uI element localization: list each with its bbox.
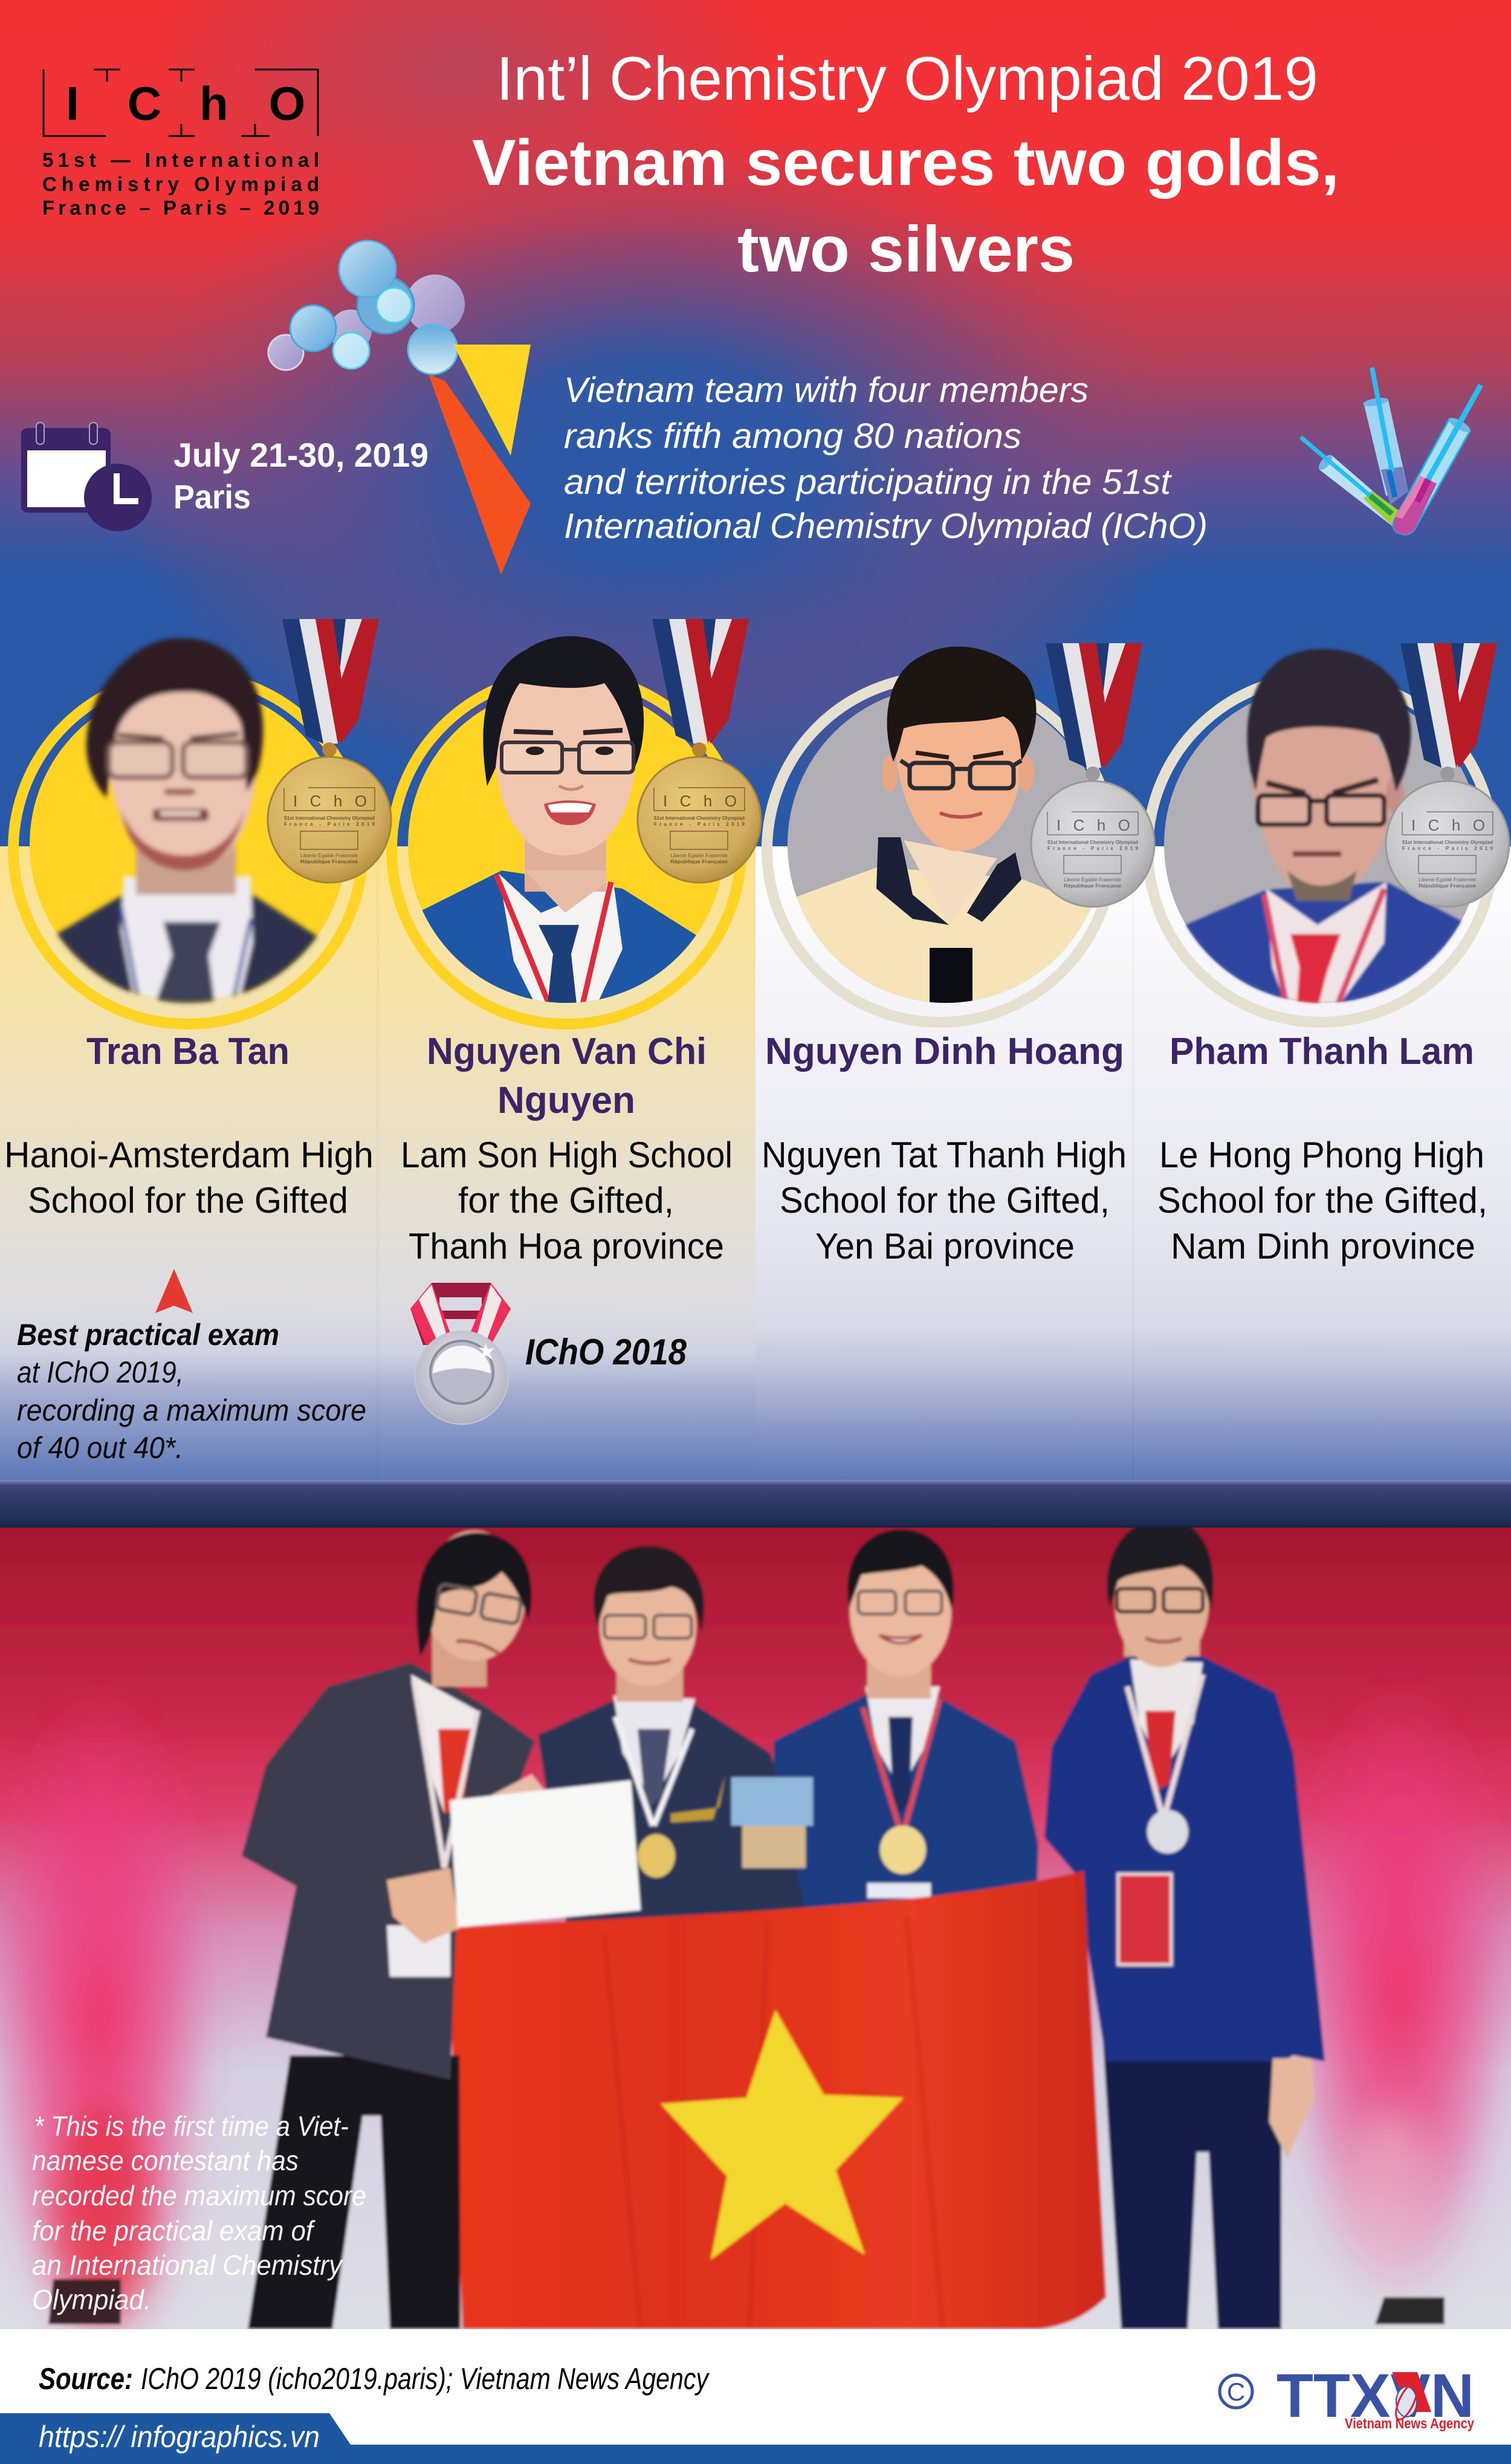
footer background bbox=[0, 2329, 1511, 2464]
IChO logo: I bbox=[66, 77, 79, 130]
IChO logo: 51st — International bbox=[42, 149, 319, 171]
title: Vietnam secures two golds, bbox=[472, 126, 1339, 199]
title: two silvers bbox=[737, 212, 1075, 285]
schools: Hanoi-Amsterdam High bbox=[4, 1135, 374, 1175]
top gradient background bbox=[0, 0, 1511, 858]
icon: IChO 2018 silver medal bbox=[410, 1283, 511, 1424]
footnote: for the practical exam of bbox=[32, 2215, 315, 2246]
footnote bbox=[32, 2110, 366, 2315]
panel: gold medallists bbox=[0, 846, 756, 1487]
footer url bar bbox=[0, 2413, 1511, 2464]
IChO 2018 label: IChO 2018 bbox=[525, 1332, 687, 1372]
medal: silver 2: France - Paris 2019 bbox=[1402, 846, 1493, 851]
names of contestants: Pham Thanh Lam bbox=[1170, 1031, 1474, 1072]
schools: for the Gifted, bbox=[458, 1180, 674, 1221]
icon: test tubes bbox=[1301, 368, 1481, 534]
medal: gold 2: Liberté Égalité Fraternité bbox=[670, 853, 728, 858]
medal: gold 1: République Française bbox=[300, 859, 358, 864]
medal: silver 2 bbox=[1386, 643, 1509, 907]
team photo bbox=[0, 1493, 1511, 2370]
icon: molecule bubbles bbox=[268, 241, 465, 374]
date and place: Paris bbox=[173, 478, 251, 516]
arrow: red pointer bbox=[155, 1269, 193, 1313]
logo: TTXVN: TTXVN bbox=[1276, 2361, 1474, 2430]
medal: silver 1 bbox=[1031, 643, 1154, 907]
IChO logo: O bbox=[269, 77, 305, 130]
schools: Nguyen Tat Thanh High bbox=[762, 1135, 1127, 1175]
best practical exam note: of 40 out 40*. bbox=[17, 1431, 183, 1465]
schools: Nam Dinh province bbox=[1171, 1226, 1475, 1266]
best practical exam note: recording a maximum score bbox=[17, 1393, 366, 1427]
person: second from right bbox=[771, 1529, 1038, 1934]
names of contestants: Nguyen Van Chi bbox=[427, 1031, 707, 1072]
schools bbox=[4, 1135, 1487, 1266]
orange triangle bbox=[429, 374, 531, 575]
footnote: * This is the first time a Viet- bbox=[34, 2110, 349, 2142]
IChO logo bbox=[42, 70, 319, 219]
schools: School for the Gifted bbox=[28, 1180, 348, 1221]
footnote: recorded the maximum score bbox=[32, 2180, 366, 2211]
schools: Yen Bai province bbox=[815, 1226, 1075, 1266]
title: Int’l Chemistry Olympiad 2019 bbox=[496, 44, 1318, 113]
footnote: Olympiad. bbox=[32, 2284, 151, 2315]
medal: silver 2: I C h O bbox=[1411, 816, 1485, 834]
IChO logo: Chemistry Olympiad bbox=[42, 173, 319, 195]
medal: silver 2: Liberté Égalité Fraternité bbox=[1419, 877, 1477, 883]
yellow triangle bbox=[453, 345, 531, 456]
IChO logo: France – Paris – 2019 bbox=[42, 196, 319, 219]
summary text: and territories participating in the 51st bbox=[564, 462, 1173, 502]
best practical exam note: Best practical exam bbox=[17, 1318, 279, 1352]
medal: gold 2 bbox=[638, 619, 761, 883]
medal: silver 2: 51st International Chemistry Olympiad bbox=[1402, 840, 1493, 845]
medal: silver 1: République Française bbox=[1064, 883, 1122, 889]
schools: Lam Son High School bbox=[401, 1135, 733, 1175]
source line: IChO 2019 (icho2019.paris); Vietnam News Agency bbox=[141, 2362, 710, 2396]
summary text bbox=[564, 371, 1208, 546]
portrait: Nguyen Dinh Hoang bbox=[767, 647, 1113, 1028]
logo: TTXVN: Vietnam News Agency bbox=[1345, 2416, 1475, 2432]
medal: gold 2: République Française bbox=[670, 859, 728, 864]
schools: Le Hong Phong High bbox=[1159, 1135, 1484, 1175]
medal: gold 1: Liberté Égalité Fraternité bbox=[300, 853, 358, 858]
source line: Source: bbox=[39, 2362, 133, 2396]
medal: silver 2: République Française bbox=[1419, 883, 1477, 889]
IChO logo: h bbox=[199, 77, 228, 130]
IChO logo: C bbox=[128, 77, 161, 130]
summary text: International Chemistry Olympiad (IChO) bbox=[564, 507, 1208, 546]
schools: School for the Gifted, bbox=[1157, 1180, 1487, 1221]
logo: TTXVN: C bbox=[1227, 2378, 1245, 2406]
medal: gold 2: 51st International Chemistry Olympiad bbox=[654, 815, 745, 821]
names of contestants: Nguyen Dinh Hoang bbox=[765, 1031, 1124, 1072]
footnote: namese contestant has bbox=[32, 2145, 299, 2176]
summary text: Vietnam team with four members bbox=[564, 371, 1089, 410]
medal: gold 1: France - Paris 2019 bbox=[284, 822, 375, 827]
panel: silver medallists bbox=[756, 846, 1511, 1487]
medal: gold 2: I C h O bbox=[663, 792, 737, 810]
best practical exam note: at IChO 2019, bbox=[17, 1355, 184, 1389]
icon: calendar and clock bbox=[21, 423, 152, 531]
person: far right bbox=[1044, 1517, 1325, 2329]
date and place: July 21-30, 2019 bbox=[173, 436, 429, 474]
medal: gold 1: 51st International Chemistry Olympiad bbox=[284, 815, 375, 821]
medal: silver 1: I C h O bbox=[1056, 816, 1130, 834]
person: second from left bbox=[538, 1546, 813, 1934]
medal: silver 1: France - Paris 2019 bbox=[1047, 846, 1139, 851]
schools: School for the Gifted, bbox=[780, 1180, 1110, 1221]
summary text: ranks fifth among 80 nations bbox=[564, 417, 1021, 456]
medal: silver 1: Liberté Égalité Fraternité bbox=[1064, 877, 1122, 883]
medal: gold 2: France - Paris 2019 bbox=[654, 822, 745, 827]
title bbox=[472, 44, 1339, 285]
names of contestants: Tran Ba Tan bbox=[86, 1031, 290, 1072]
portrait: Pham Thanh Lam bbox=[1148, 649, 1493, 1028]
names of contestants: Nguyen bbox=[497, 1080, 635, 1121]
person: far left bbox=[242, 1531, 641, 2329]
medal: silver 1: 51st International Chemistry Olympiad bbox=[1047, 840, 1138, 845]
date and place bbox=[173, 436, 429, 516]
footer url bar: https:// infographics.vn bbox=[39, 2420, 320, 2454]
portrait: Tran Ba Tan bbox=[13, 638, 363, 1028]
medal: gold 1 bbox=[268, 619, 391, 883]
flag of Vietnam bbox=[448, 1871, 1106, 2329]
medal: gold 1: I C h O bbox=[293, 792, 367, 810]
schools: Thanh Hoa province bbox=[409, 1226, 724, 1266]
best practical exam note bbox=[17, 1318, 366, 1465]
names of contestants bbox=[86, 1031, 1474, 1121]
footnote: an International Chemistry bbox=[32, 2249, 344, 2281]
portrait: Nguyen Van Chi Nguyen bbox=[392, 636, 741, 1028]
